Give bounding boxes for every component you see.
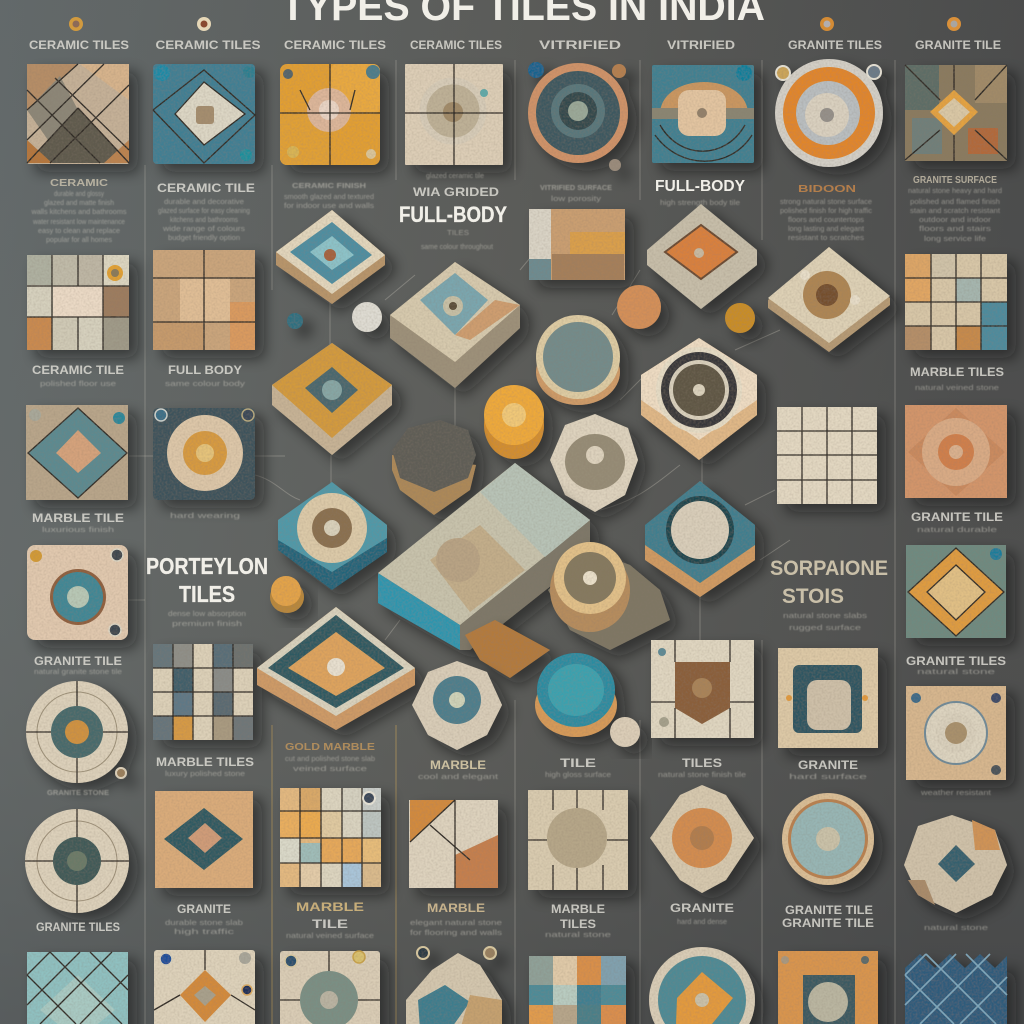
row labels bottom: GRANITE — [670, 903, 734, 915]
captions row one: for indoor use and walls — [284, 201, 374, 210]
tile: teal with sand centre — [652, 65, 754, 163]
mid labels: TILE — [560, 758, 596, 770]
column labels row one: GRANITE TILE — [915, 40, 1001, 52]
captions row one: walls kitchens and bathrooms — [31, 207, 127, 216]
tile: dark stone — [392, 420, 476, 515]
tile: stone hexagon — [904, 815, 1007, 913]
label: porcelain: premium finish — [172, 619, 242, 628]
tile: bottom teal lattice — [27, 952, 128, 1024]
mid labels — [34, 656, 1006, 797]
column labels row one: CERAMIC TILES — [284, 40, 386, 52]
mid labels: hard surface — [789, 772, 867, 781]
row labels bottom: high traffic — [174, 927, 234, 936]
tile: grey diamond — [647, 204, 757, 309]
row labels bottom: TILE — [312, 919, 348, 931]
tile: bottom mixed hex — [406, 947, 502, 1024]
row labels: same colour body — [165, 379, 245, 388]
tile: cream orange broken — [409, 800, 498, 888]
captions row one: glazed ceramic tile — [426, 171, 484, 180]
tile: diamond teal — [276, 210, 385, 304]
tile: gold hexagon — [272, 343, 392, 455]
tile: round orange — [775, 59, 883, 167]
tile: round cream left — [27, 545, 128, 640]
row labels — [32, 365, 1004, 534]
captions row one: durable and decorative — [164, 197, 244, 206]
tile: orange star — [906, 545, 1006, 638]
row labels: MARBLE TILES — [910, 367, 1004, 379]
row labels: polished floor use — [40, 379, 116, 388]
row labels bottom: GRANITE TILES — [36, 922, 120, 934]
row labels bottom: MARBLE — [296, 902, 364, 914]
captions row one: FULL-BODY — [399, 202, 507, 227]
captions row one: GRANITE SURFACE — [913, 175, 997, 186]
captions row one: natural stone heavy and hard — [908, 186, 1002, 195]
captions row one: polished and flamed finish — [910, 197, 1000, 206]
column labels row one: VITRIFIED — [667, 40, 735, 52]
tile: grid right — [905, 254, 1007, 350]
captions row one: same colour throughout — [421, 242, 494, 251]
tile: navy grid — [153, 644, 253, 740]
tile: orange teal grid — [280, 788, 381, 887]
tile: stacked disc — [465, 542, 670, 678]
captions row one: CERAMIC TILE — [157, 183, 255, 195]
row labels bottom — [36, 902, 988, 940]
tile: ceramic teal — [153, 64, 255, 164]
captions row one: polished finish for high traffic — [780, 206, 872, 215]
mid labels: veined surface — [293, 764, 367, 773]
column labels row one: CERAMIC TILES — [156, 40, 261, 52]
mid labels: MARBLE — [430, 760, 486, 772]
tile: bottom round — [649, 947, 755, 1024]
row labels: luxurious finish — [42, 525, 114, 534]
row labels bottom: natural stone — [545, 930, 611, 939]
captions row one: VITRIFIED SURFACE — [540, 183, 612, 192]
tile: round left two — [25, 809, 129, 913]
tile: ceramic mosaic — [27, 64, 129, 164]
row labels bottom: for flooring and walls — [410, 928, 502, 937]
tile: dark circle — [153, 408, 255, 500]
tile: cream circle right — [906, 686, 1006, 780]
tile: teal cream hexagon — [645, 481, 755, 597]
captions row one: smooth glazed and textured — [284, 192, 374, 201]
row labels: natural veined stone — [915, 383, 999, 392]
captions row one: CERAMIC FINISH — [292, 181, 366, 190]
small balls upper centre — [287, 285, 755, 333]
tile: well disc — [536, 315, 620, 405]
captions row one: water resistant low maintenance — [32, 217, 125, 226]
tile: central large — [378, 463, 590, 650]
label: sandstone: SORPAIONE — [770, 557, 888, 580]
row labels bottom: durable stone slab — [165, 918, 243, 927]
mid labels: natural stone finish tile — [658, 770, 746, 779]
captions row one: popular for all homes — [46, 235, 112, 244]
tile: cream stone medallion — [550, 414, 638, 512]
captions row one: high strength body tile — [660, 198, 740, 207]
mid labels: GRANITE STONE — [47, 788, 109, 797]
row labels bottom: MARBLE — [551, 904, 605, 916]
mid labels: cool and elegant — [418, 772, 499, 781]
row labels: FULL BODY — [168, 365, 242, 377]
tile: bottom cream circle — [280, 951, 380, 1024]
row labels: natural durable — [917, 525, 997, 534]
tile: diamond in square — [26, 405, 128, 500]
mid labels: GRANITE TILES — [906, 656, 1006, 668]
row labels: MARBLE TILE — [32, 513, 124, 525]
tile: round teal orange — [782, 793, 874, 885]
row labels bottom: hard and dense — [677, 917, 727, 926]
row labels bottom: GRANITE TILE — [782, 918, 874, 930]
captions row one: outdoor and indoor — [919, 215, 992, 224]
column labels row one: CERAMIC TILES — [410, 40, 502, 52]
mid labels: luxury polished stone — [165, 769, 245, 778]
mid labels: TILES — [682, 758, 722, 770]
tile: bottom orange — [778, 951, 878, 1024]
mid labels: natural stone — [917, 667, 995, 676]
captions row one: long service life — [924, 234, 986, 243]
tile: cream brown crest — [651, 640, 754, 738]
tile: concentric hexagon — [641, 338, 757, 460]
captions row one: WIA GRIDED — [413, 187, 499, 199]
column labels row one: CERAMIC TILES — [29, 40, 129, 52]
tile: cream hex teal — [412, 661, 502, 750]
tile: bottom orange diamond — [154, 950, 255, 1024]
tile: diamond gold navy — [257, 607, 415, 730]
tile: ceramic orange — [280, 64, 380, 165]
row labels: hard wearing — [170, 511, 240, 520]
ball: orange — [270, 576, 304, 613]
label: sandstone: natural stone slabs — [783, 611, 867, 620]
tile: bottom mosaic — [529, 956, 626, 1024]
mid labels: GRANITE — [798, 760, 858, 772]
tile: sandy grid — [153, 250, 255, 350]
mid labels: natural granite stone tile — [34, 667, 122, 676]
tile: sand circle — [905, 405, 1007, 498]
tile: round teal vitrified — [528, 62, 628, 171]
captions row one: durable and glossy — [54, 189, 104, 198]
captions row one: FULL-BODY — [655, 178, 745, 195]
row labels bottom: GRANITE — [177, 904, 231, 916]
captions row one: glazed surface for easy cleaning — [158, 206, 250, 215]
captions row one: budget friendly option — [168, 233, 240, 242]
mid labels: high gloss surface — [545, 770, 611, 779]
tile: sandy rectangle — [529, 209, 625, 280]
label: sandstone: STOIS — [782, 585, 844, 608]
tile: cream square navy — [778, 648, 878, 748]
mid labels: GOLD MARBLE — [285, 742, 375, 753]
label: porcelain: TILES — [179, 581, 235, 607]
captions row one: BIDOON — [798, 184, 856, 195]
captions row one: stain and scratch resistant — [910, 206, 1001, 215]
tile: sand with navy diamond — [155, 791, 253, 888]
ball: small cream — [610, 717, 640, 747]
captions row one: easy to clean and replace — [38, 226, 120, 235]
pins row one — [69, 17, 961, 31]
mid labels: weather resistant — [920, 788, 992, 797]
label: porcelain — [146, 553, 268, 628]
tile: cream engraved — [528, 790, 628, 890]
captions row one: strong natural stone surface — [780, 197, 872, 206]
row labels bottom: natural stone — [924, 923, 988, 932]
column labels row one: GRANITE TILES — [788, 40, 882, 52]
tile: bottom navy lattice — [905, 954, 1007, 1024]
captions row one: kitchens and bathrooms — [170, 215, 238, 224]
mid labels: cut and polished stone slab — [285, 754, 375, 763]
label: porcelain: dense low absorption — [168, 609, 246, 618]
tile: patterned multicolour — [905, 65, 1007, 161]
tile: teal hexagon — [278, 482, 387, 590]
captions row one — [31, 171, 1002, 251]
captions row one: TILES — [447, 228, 469, 237]
captions row one: wide range of colours — [162, 224, 245, 233]
mid labels: GRANITE TILE — [34, 656, 122, 668]
tile: cream grid — [777, 407, 877, 504]
captions row one: resistant to scratches — [788, 233, 864, 242]
row labels: CERAMIC TILE — [32, 365, 124, 377]
tile: sand diamond — [768, 247, 890, 352]
tile: teal disc — [535, 653, 617, 737]
captions row one: floors and stairs — [919, 224, 991, 233]
tile: diamond orange — [650, 785, 754, 893]
mid labels: MARBLE TILES — [156, 757, 254, 769]
label: sandstone: rugged surface — [789, 623, 861, 632]
row labels: GRANITE TILE — [911, 512, 1003, 524]
column labels row one — [29, 40, 1001, 52]
row labels bottom: elegant natural stone — [410, 918, 502, 927]
captions row one: glazed and matte finish — [44, 198, 114, 207]
row labels bottom: GRANITE TILE — [785, 905, 873, 917]
row labels bottom: natural veined surface — [286, 931, 374, 940]
tile: centre hexagon — [390, 262, 520, 388]
column labels row one: VITRIFIED — [539, 40, 621, 52]
label: porcelain: PORTEYLON — [146, 553, 268, 579]
captions row one: floors and countertops — [788, 215, 864, 224]
label: sandstone — [770, 557, 888, 632]
ball: amber — [484, 385, 544, 459]
tile: round left one — [26, 681, 128, 783]
captions row one: CERAMIC — [50, 178, 108, 189]
row labels bottom: TILES — [560, 919, 596, 931]
row labels bottom: MARBLE — [427, 903, 485, 915]
captions row one: long lasting and elegant — [788, 224, 865, 233]
tile: cream medallion — [405, 64, 503, 165]
tile: grid tile left — [27, 255, 129, 350]
captions row one: low porosity — [551, 194, 601, 203]
